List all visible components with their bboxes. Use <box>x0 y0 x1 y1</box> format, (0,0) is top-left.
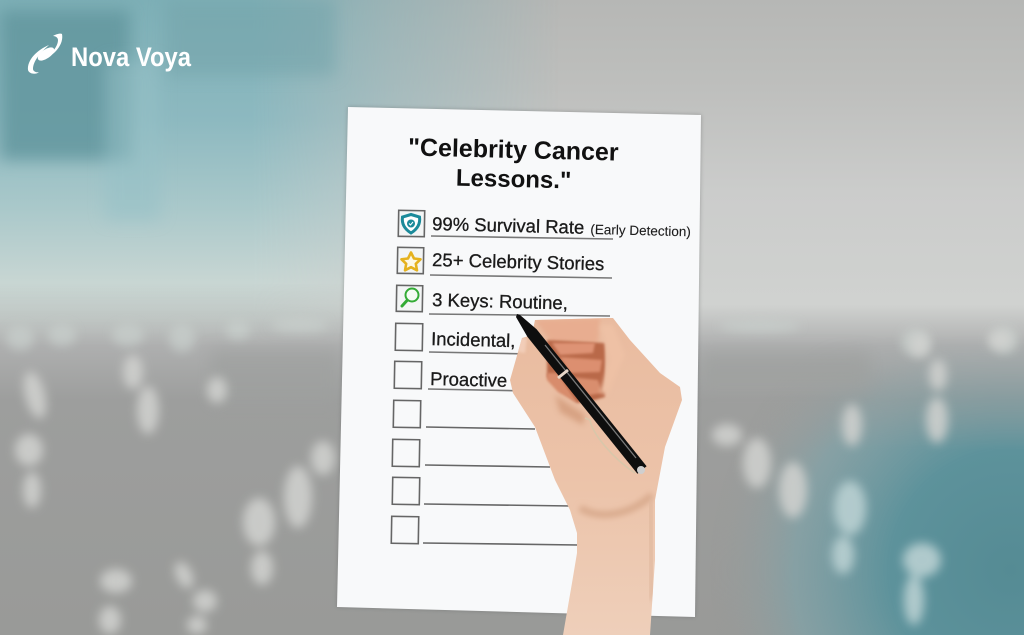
logo: Nova Voya <box>28 34 192 74</box>
checklist row: 3 keys routine: 3 Keys: Routine, <box>432 289 568 313</box>
icon: shield <box>402 214 420 233</box>
checklist row: incidental: Incidental, <box>431 328 516 351</box>
hand holding pen <box>510 314 682 635</box>
empty checklist rows <box>391 400 578 545</box>
icon: logo swoosh <box>28 34 62 74</box>
panel: paper checklist <box>337 107 701 617</box>
pen <box>516 314 647 474</box>
checklist row: celebrity stories: 25+ Celebrity Stories <box>432 249 605 274</box>
hand <box>510 318 682 635</box>
checklist row: incidental <box>395 323 530 354</box>
checklist row: 3 keys routine <box>396 285 610 316</box>
checklist row: proactive: Proactive <box>430 368 508 391</box>
checklist row: proactive <box>394 361 530 391</box>
checklist row: 99% survival rate: 99% Survival Rate (Early Detection) <box>432 213 691 240</box>
checklist row: celebrity stories <box>397 247 612 278</box>
icon: magnifier <box>402 288 418 306</box>
title: "Celebrity Cancer <box>408 133 619 167</box>
title: Lessons." <box>456 165 572 194</box>
title <box>407 133 619 196</box>
icon: star <box>402 252 420 270</box>
logo wordmark: Nova Voya <box>71 42 192 72</box>
